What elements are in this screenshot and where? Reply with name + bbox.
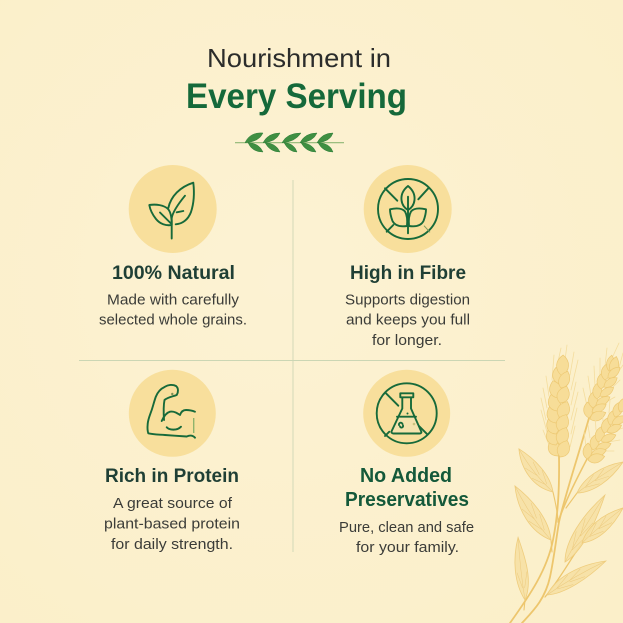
title: no added preservatives: Preservatives [345,489,469,511]
description: preservatives: Pure, clean and safe [339,519,474,536]
icon: flask in crossed circle [363,370,450,457]
icon: leaf sprig divider [235,133,344,152]
title: no added preservatives [345,465,469,511]
wheat ear: centre [541,345,578,459]
panel: 100% natural [99,165,247,328]
title: rich in protein: Rich in Protein [105,466,239,487]
title: high in fibre: High in Fibre [350,263,466,284]
icon: flexed arm [129,370,216,457]
description: preservatives [339,519,474,556]
description: natural: selected whole grains. [99,312,247,328]
heading: Nourishment in [207,43,391,73]
wheat decoration [507,343,623,623]
heading highlight: Every Serving [186,77,407,116]
icon: plant in crossed circle [364,165,452,253]
description: protein: for daily strength. [111,536,233,553]
wheat ear: upper right [583,343,623,423]
description: fibre: and keeps you full [346,312,470,328]
description: fibre: Supports digestion [345,292,470,308]
wheat ear: lower right [583,396,623,464]
description: fibre [345,292,470,349]
title: no added preservatives: No Added [360,465,452,487]
icon: leaves in circle [129,165,217,253]
panel: rich in protein [104,370,240,553]
description: protein: plant-based protein [104,516,240,532]
description: fibre: for longer. [372,332,442,349]
title: 100% natural: 100% Natural [112,263,235,284]
description: protein [104,495,240,553]
description: natural [99,292,247,328]
description: protein: A great source of [113,495,233,512]
description: natural: Made with carefully [107,292,240,308]
description: preservatives: for your family. [356,539,459,556]
heading [186,43,407,116]
panel: high in fibre [345,165,470,349]
panel: no added preservatives [339,370,474,556]
